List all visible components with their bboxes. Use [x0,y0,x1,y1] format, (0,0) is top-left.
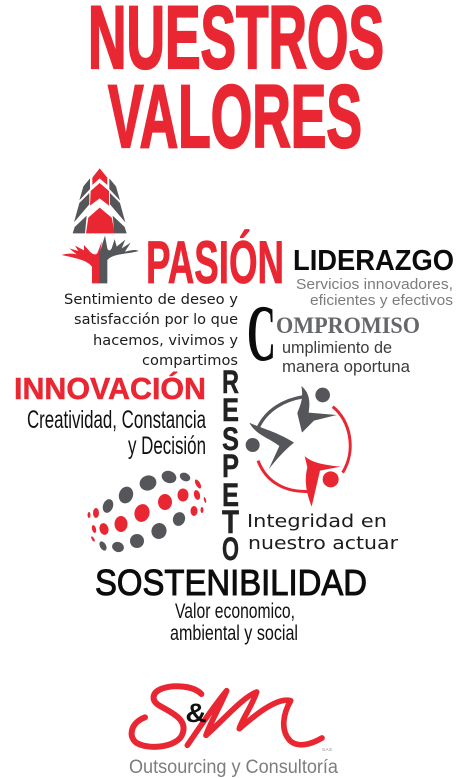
title [88,0,384,166]
text: SAS mark: SAS [322,747,332,752]
heading: pasión: PASIÓN [146,229,284,296]
logo: S&M [132,686,322,747]
text: pasión description: Sentimiento de deseo y [64,292,238,308]
heading: respeto vertical: O [222,531,239,567]
text: pasión description: compartimos [142,353,238,369]
text: sostenibilidad description: ambiental y social [170,622,298,645]
text: sostenibilidad description [170,600,298,645]
heading: respeto vertical: S [222,421,239,457]
text: innovación description [27,406,206,460]
text: pasión description [64,292,238,369]
heading: innovación: INNOVACIÓN [14,370,206,406]
text: innovación description: Creatividad, Constancia [27,406,206,434]
text: sostenibilidad description: Valor economico, [175,600,295,623]
heading: compromiso: C [247,290,276,378]
text: liderazgo description: Servicios innovadores, [296,276,453,293]
text: pasión description: hacemos, vivimos y [93,333,238,349]
text: innovación description: y Decisión [128,432,206,460]
heading: respeto vertical: P [222,448,239,484]
heading: liderazgo: LIDERAZGO [293,245,454,277]
heading: sostenibilidad: SOSTENIBILIDAD [95,562,367,603]
heading: respeto vertical: R [222,364,239,400]
text: respeto description: nuestro actuar [248,534,399,554]
heading: respeto vertical [222,364,239,567]
text: liderazgo description: eficientes y efectivos [310,292,453,309]
icon: dotted sphere [88,469,207,554]
text: logo tagline: Outsourcing y Consultoría [129,757,338,778]
text: liderazgo description [296,276,453,309]
text: compromiso description: manera oportuna [282,357,411,376]
heading: respeto vertical: T [222,504,239,540]
text: compromiso description [282,338,411,376]
heading: respeto vertical: E [222,477,239,513]
icon: three figures in a circle [246,386,350,507]
heading: compromiso: OMPROMISO [276,313,420,338]
text: respeto description [247,512,399,554]
heading: respeto vertical: E [222,392,239,428]
heading: compromiso [247,290,420,378]
text: respeto description: Integridad en [247,512,387,532]
logo: S&M: & [185,698,207,728]
text: pasión description: satisfacción por lo que [74,312,238,328]
text: compromiso description: umplimiento de [282,338,392,357]
icon: building and hands [62,168,139,283]
